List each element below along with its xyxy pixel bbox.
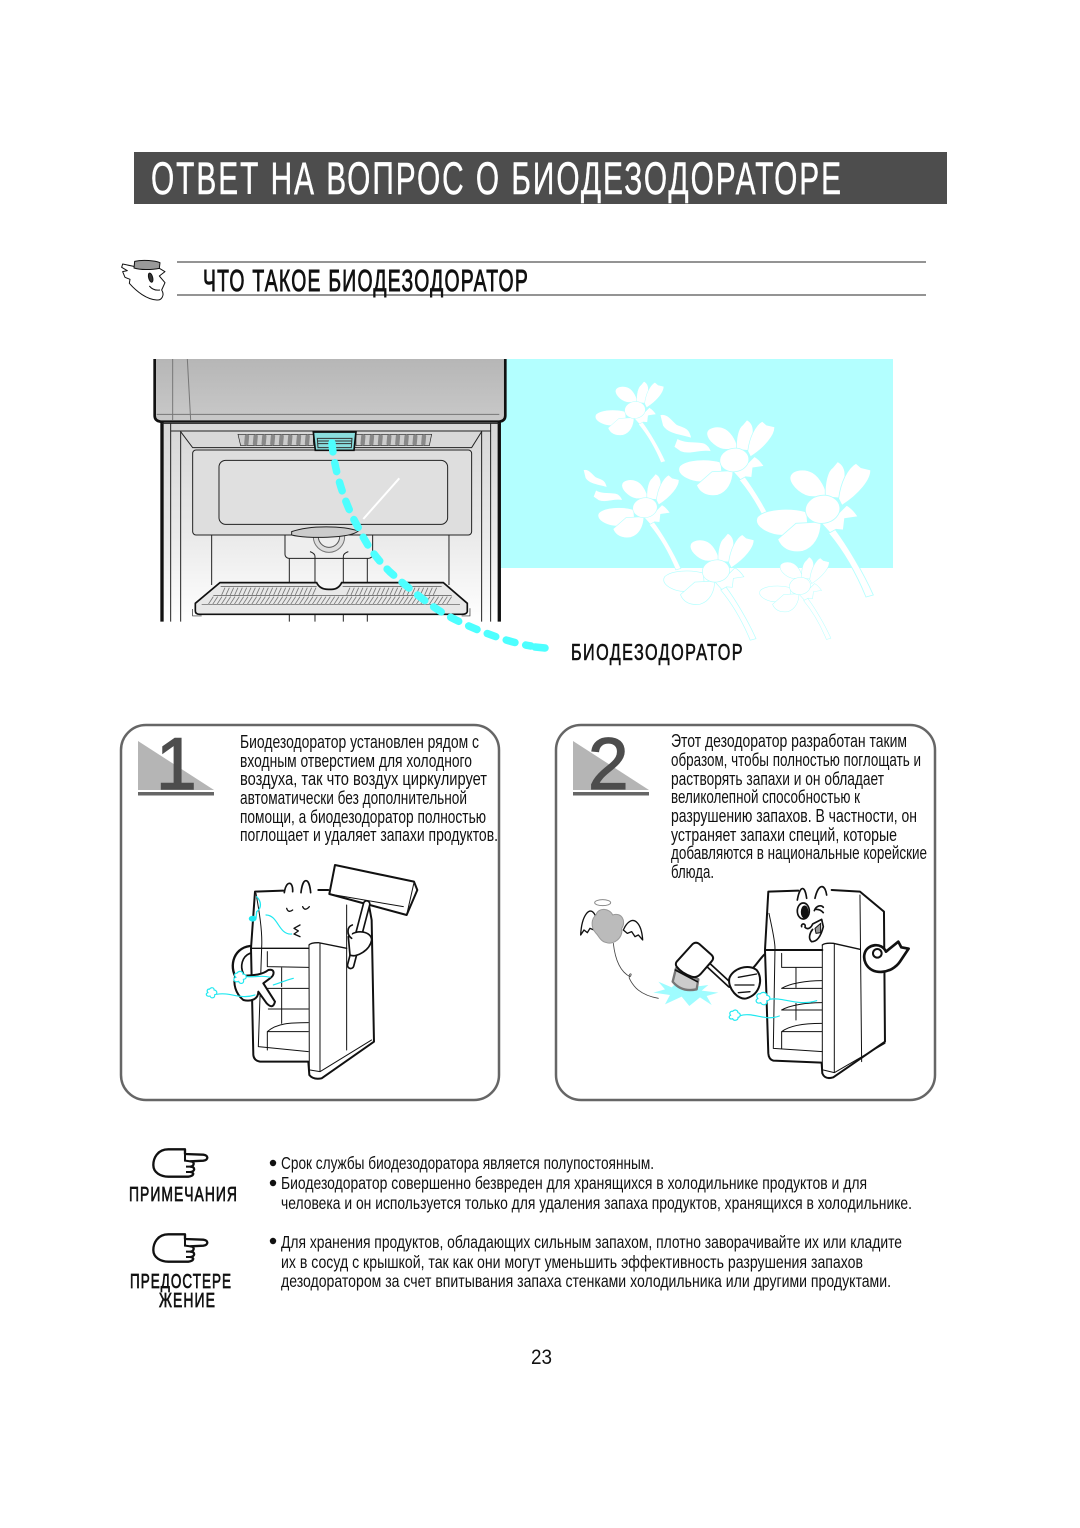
upper door [155, 359, 505, 422]
step number 1 [138, 724, 214, 805]
step 1 text: Биодезодоратор установлен рядом с [240, 732, 479, 752]
step 2 text: Этот дезодоратор разработан таким [671, 731, 907, 751]
step number 2 [573, 724, 649, 805]
biodeodorizer unit [313, 432, 356, 450]
step 2 text: устраняет запахи специй, которые [671, 825, 897, 845]
step 1 text: автоматически без дополнительной [240, 788, 467, 808]
step 2 text: образом, чтобы полностью поглощать и [671, 750, 921, 770]
illustration: fridge smashing odor [581, 887, 909, 1078]
splash [653, 982, 718, 1006]
step 1 text [240, 732, 498, 845]
note: warning text: Для хранения продуктов, обладающих сильным запахом, плотно заворачивайте их или кладите [281, 1232, 902, 1252]
note: remarks icon and label [129, 1149, 238, 1206]
step number 1: 1 [156, 724, 197, 805]
hand-held deodorizer box [329, 865, 417, 965]
illustration: fridge with deodorizer [206, 865, 417, 1079]
icon: mascot head [122, 260, 165, 300]
note: remarks text: Срок службы биодезодоратора является полупостоянным. [281, 1153, 654, 1173]
page number: 23 [531, 1346, 552, 1369]
face [797, 887, 827, 900]
step 1 text: поглощает и удаляет запахи продуктов. [240, 825, 498, 845]
cyan scent [206, 897, 293, 998]
arrow: dashed cyan pointer [332, 443, 545, 648]
note: warning icon and label: ПРЕДОСТЕРЕ [130, 1271, 232, 1293]
step 1 text: воздуха, так что воздух циркулирует [240, 769, 487, 789]
step 2 text: великолепной способностью к [671, 787, 860, 807]
icon: pointing hand warning [153, 1234, 207, 1262]
section heading [122, 260, 926, 300]
hammer [673, 943, 730, 990]
note: warning icon and label [130, 1234, 232, 1312]
panel: step 1 [121, 724, 499, 1100]
section heading: ЧТО ТАКОЕ БИОДЕЗОДОРАТОР [203, 263, 529, 298]
step 1 text: входным отверстием для холодного [240, 751, 472, 771]
step 2 text: блюда. [671, 862, 714, 882]
note: warning text: их в сосуд с крышкой, так как они могут уменьшить эффективность разрушения запахов [281, 1252, 863, 1272]
odor angel [581, 900, 658, 998]
recess and spout [212, 535, 449, 622]
step 2 text: разрушению запахов. В частности, он [671, 806, 917, 826]
step 2 text [671, 731, 927, 882]
note: warning text: дезодоратором за счет впитывания запаха стенками холодильника или другими продуктами. [281, 1271, 891, 1291]
panel: cyan flower background [500, 359, 893, 640]
fridge body [765, 892, 885, 1078]
step 2 text: добавляются в национальные корейские [671, 843, 927, 863]
step number 2: 2 [588, 724, 629, 805]
note: warning icon and label: ЖЕНИЕ [159, 1290, 216, 1312]
drip tray [193, 583, 470, 616]
dispenser body [162, 423, 500, 622]
note: warning text [270, 1232, 902, 1291]
illustration: refrigerator dispenser [155, 359, 505, 622]
arms and hands [752, 954, 765, 969]
cyan scent [729, 992, 817, 1020]
note: remarks icon and label: ПРИМЕЧАНИЯ [129, 1184, 238, 1206]
step 2 text: растворять запахи и он обладает [671, 769, 884, 789]
panel: step 2 [556, 724, 935, 1100]
note: remarks text [270, 1153, 912, 1213]
vent slats [238, 434, 432, 446]
label: biodeodorizer: БИОДЕЗОДОРАТОР [571, 639, 744, 665]
note: remarks text: человека и он используется только для удаления запаха продуктов, хранящихся в холодильнике. [281, 1193, 912, 1213]
note: remarks text: Биодезодоратор совершенно безвреден для хранящихся в холодильнике продуктов и для [281, 1173, 867, 1193]
icon: pointing hand [153, 1149, 207, 1177]
step 1 text: помощи, а биодезодоратор полностью [240, 807, 486, 827]
